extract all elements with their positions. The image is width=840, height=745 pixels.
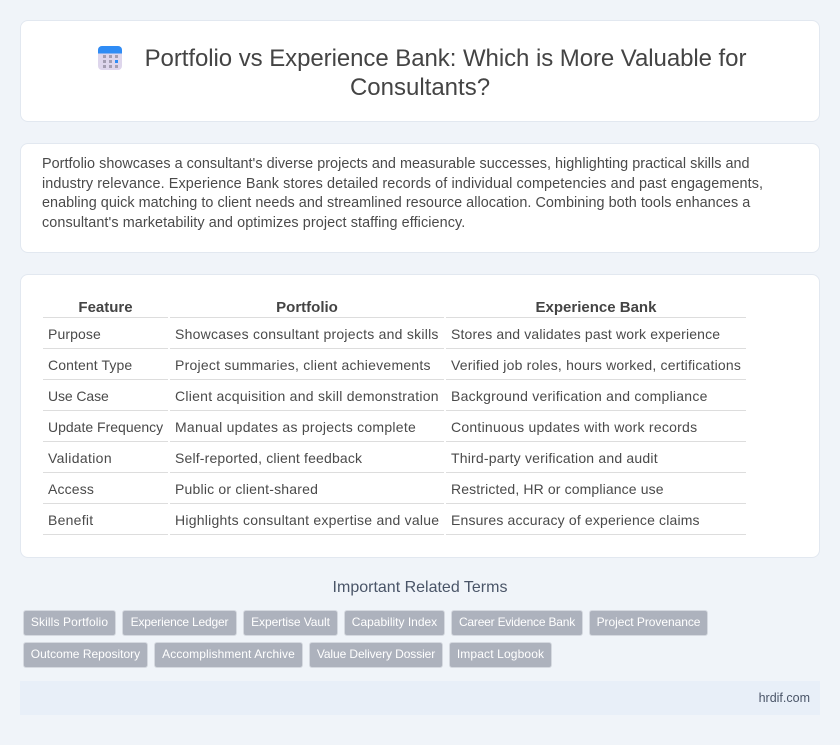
related terms tags: Capability Index <box>352 615 437 629</box>
comparison table: Update Frequency <box>48 419 163 435</box>
comparison table: Restricted, HR or compliance use <box>451 481 664 497</box>
comparison table <box>43 299 746 535</box>
footer source: hrdif.com <box>759 691 810 705</box>
comparison table: Highlights consultant expertise and value <box>175 512 439 528</box>
related terms tags: Expertise Vault <box>251 615 330 629</box>
text block: description: industry relevance. Experience Bank stores detailed records of individual competencies and past engagements, <box>42 176 763 192</box>
comparison table: Showcases consultant projects and skills <box>175 326 439 342</box>
related terms tags: Value Delivery Dossier <box>317 647 435 661</box>
comparison table: Use Case <box>48 388 109 404</box>
title <box>145 45 746 101</box>
comparison table: Feature <box>78 299 133 316</box>
related terms tags: Experience Ledger <box>131 615 228 629</box>
comparison table: Purpose <box>48 326 101 342</box>
panel: title card <box>20 20 820 122</box>
text block: description <box>42 156 763 230</box>
comparison table: Benefit <box>48 512 93 528</box>
comparison table: Stores and validates past work experience <box>451 326 720 342</box>
comparison table: Verified job roles, hours worked, certifications <box>451 357 741 373</box>
comparison table: Portfolio <box>276 299 338 316</box>
heading: related terms: Important Related Terms <box>333 579 507 596</box>
related terms tags: Project Provenance <box>597 615 700 629</box>
comparison table: Public or client-shared <box>175 481 318 497</box>
comparison table: Ensures accuracy of experience claims <box>451 512 700 528</box>
related terms tags: Outcome Repository <box>31 647 140 661</box>
comparison table: Access <box>48 481 94 497</box>
text block: description: Portfolio showcases a consultant's diverse projects and measurable successes, highlighting practical skills and <box>42 156 750 172</box>
icon: calendar <box>98 46 122 70</box>
comparison table: Client acquisition and skill demonstration <box>175 388 439 404</box>
related terms tags: Career Evidence Bank <box>459 615 575 629</box>
comparison table: Third-party verification and audit <box>451 450 658 466</box>
comparison table: Validation <box>48 450 112 466</box>
related terms tags <box>23 610 708 668</box>
panel: description card <box>20 143 820 253</box>
comparison table: Continuous updates with work records <box>451 419 697 435</box>
comparison table: Experience Bank <box>536 299 656 316</box>
title: Portfolio vs Experience Bank: Which is More Valuable for <box>145 45 746 72</box>
text block: description: enabling quick matching to client needs and streamlined resource allocation. Combining both tools enhances a <box>42 195 750 211</box>
title: Consultants? <box>350 74 490 101</box>
related terms tags: Accomplishment Archive <box>162 647 295 661</box>
comparison table: Content Type <box>48 357 132 373</box>
related terms tags: Impact Logbook <box>457 647 544 661</box>
comparison table: Manual updates as projects complete <box>175 419 416 435</box>
comparison table: Background verification and compliance <box>451 388 708 404</box>
comparison table: Self-reported, client feedback <box>175 450 362 466</box>
footer bar <box>20 681 820 715</box>
related terms tags: Skills Portfolio <box>31 615 108 629</box>
comparison table: Project summaries, client achievements <box>175 357 431 373</box>
text block: description: consultant's marketability and optimizes project staffing efficiency. <box>42 214 465 230</box>
panel: comparison table card <box>20 274 820 558</box>
